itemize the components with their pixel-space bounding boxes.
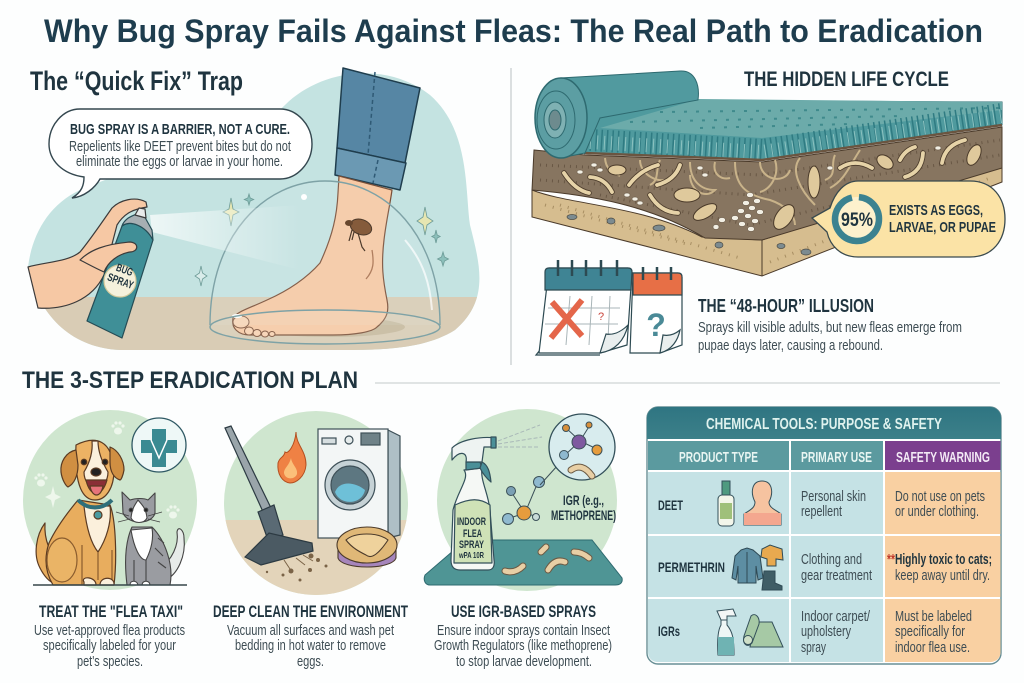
- text block: deep clean: eggs.: [297, 653, 324, 670]
- text block: deep clean: [227, 622, 395, 670]
- row: permethrin: keep away until dry.: [895, 567, 990, 584]
- circle background: [437, 409, 617, 591]
- can label text: SPRAY: [106, 271, 135, 292]
- step 2: deep clean: [213, 405, 410, 670]
- carpet roll: [535, 71, 698, 158]
- row: permethrin: PERMETHRIN: [658, 559, 725, 575]
- text block: 48-hour illusion: pupae days later, causing a rebound.: [698, 337, 883, 354]
- paw prints and sparkles: [34, 421, 180, 518]
- panel: 48-hour illusion: [536, 260, 962, 355]
- heading: IGR sprays: USE IGR-BASED SPRAYS: [451, 602, 596, 621]
- icon: spray bottle: [451, 437, 496, 570]
- bottle label text: [457, 516, 486, 560]
- icon: flame: [278, 432, 306, 483]
- row: permethrin: Clothing and: [801, 551, 862, 568]
- icon: spray and carpet roll: [717, 609, 783, 655]
- jeans leg: [335, 68, 420, 190]
- row: DEET: or under clothing.: [895, 503, 979, 520]
- heading: treat the flea taxi: TREAT THE "FLEA TAXI": [39, 602, 183, 621]
- donut chart: [833, 195, 881, 243]
- sparkles: [195, 194, 448, 286]
- text block: 48-hour illusion: [698, 319, 962, 354]
- larvae on mat: [505, 547, 589, 572]
- row: IGRs: upholstery: [801, 623, 851, 640]
- icon: flea: [345, 216, 374, 251]
- can label text: BUG: [114, 262, 134, 279]
- glass dome: [210, 181, 440, 344]
- icon: dog: [36, 440, 124, 585]
- text block: deep clean: bedding in hot water to remove: [235, 637, 386, 654]
- circle background: [23, 410, 197, 590]
- callout: 95 percent: EXISTS AS EGGS,: [889, 202, 983, 219]
- speech bubble: [49, 109, 312, 198]
- icon: cat: [116, 492, 184, 585]
- bottle label text: wPA 10R: [458, 550, 484, 560]
- carpet mat: [424, 540, 622, 585]
- icon: vacuum cleaner: [225, 426, 313, 565]
- bare foot with flea: [232, 176, 392, 337]
- speech bubble: eliminate the eggs or larvae in your home.: [76, 153, 283, 170]
- icon: blue calendar: ?: [598, 311, 604, 323]
- icon: jacket, shirt and boot: [732, 545, 783, 590]
- icon: orange calendar: [630, 267, 682, 353]
- table frame: [647, 407, 1001, 664]
- heading: quick fix trap: The “Quick Fix” Trap: [30, 66, 243, 96]
- row: IGRs: Must be labeled: [895, 608, 972, 625]
- text block: treat the flea taxi: [34, 622, 185, 670]
- donut chart: 95%: [841, 210, 873, 231]
- table title bar: [647, 407, 1001, 439]
- heading: 48-hour illusion: THE “48-HOUR” ILLUSION: [698, 296, 874, 316]
- row: IGRs: specifically for: [895, 623, 965, 640]
- spray mist: [150, 205, 300, 270]
- column headers: [648, 441, 1000, 470]
- row: DEET: Do not use on pets: [895, 488, 985, 505]
- row: permethrin: gear treatment: [801, 567, 873, 584]
- scene background blob: [20, 73, 490, 357]
- molecule: [502, 476, 544, 524]
- panel: quick fix trap: [20, 66, 490, 357]
- title: Why Bug Spray Fails Against Fleas: The Real Path to Eradication: [44, 13, 983, 49]
- icon: orange calendar: ?: [646, 307, 666, 343]
- text block: IGR sprays: Growth Regulators (like methoprene): [434, 637, 612, 654]
- panel: chemical tools table: [647, 407, 1001, 664]
- eggs: [577, 146, 941, 232]
- label: IGR methoprene: METHOPRENE): [551, 507, 616, 523]
- can label text: [106, 260, 140, 292]
- icon: washing machine: [318, 429, 400, 538]
- row: IGRs: spray: [801, 639, 826, 656]
- magnified IGR bubble: [540, 414, 615, 485]
- row: IGRs: indoor flea use.: [895, 639, 970, 656]
- column headers: PRIMARY USE: [801, 450, 872, 466]
- column headers: SAFETY WARNING: [896, 450, 990, 466]
- carpet: [584, 99, 1002, 160]
- row: DEET: DEET: [658, 497, 683, 513]
- label: IGR methoprene: IGR (e.g.,: [563, 492, 604, 508]
- heading: hidden life cycle: THE HIDDEN LIFE CYCLE: [744, 68, 949, 91]
- row: permethrin: [648, 536, 1000, 597]
- speech bubble: Repelients like DEET prevent bites but do not: [69, 138, 292, 155]
- row: DEET: [648, 472, 1000, 534]
- text block: IGR sprays: Ensure indoor sprays contain Insect: [437, 622, 611, 639]
- icon: repellent bottle and skin: [718, 481, 781, 526]
- pupae: [608, 142, 984, 233]
- text block: IGR sprays: to stop larvae development.: [456, 653, 592, 670]
- icon: vet badge: [132, 418, 186, 472]
- hand and spray can: [28, 199, 153, 338]
- table title bar: CHEMICAL TOOLS: PURPOSE & SAFETY: [706, 416, 942, 433]
- speech bubble: BUG SPRAY IS A BARRIER, NOT A CURE.: [70, 121, 290, 138]
- text block: treat the flea taxi: pet's species.: [77, 653, 143, 670]
- spray mist: [498, 425, 542, 447]
- label: IGR methoprene: [551, 492, 616, 523]
- row: DEET: repellent: [801, 503, 843, 520]
- step 1: treat the flea taxi: [23, 410, 197, 670]
- text block: IGR sprays: [434, 622, 612, 670]
- debris: [266, 554, 328, 582]
- heading: deep clean: DEEP CLEAN THE ENVIRONMENT: [213, 602, 408, 621]
- larvae: [564, 140, 965, 213]
- icon: pet bed: [337, 527, 397, 567]
- bottle label text: FLEA: [463, 528, 482, 540]
- callout: 95 percent: [812, 181, 1005, 257]
- soil cross-section: [532, 127, 1002, 276]
- heading: 3-step eradication plan: THE 3-STEP ERADICATION PLAN: [22, 367, 358, 394]
- text block: deep clean: Vacuum all surfaces and wash pet: [227, 622, 395, 639]
- icon: blue calendar: [536, 260, 632, 355]
- row: IGRs: IGRs: [658, 623, 680, 639]
- text block: treat the flea taxi: Use vet-approved flea products: [34, 622, 185, 639]
- row: IGRs: [648, 599, 1000, 662]
- row: DEET: Personal skin: [801, 488, 866, 505]
- row: IGRs: Indoor carpet/: [801, 608, 871, 625]
- step 3: IGR sprays: [424, 409, 622, 670]
- column headers: PRODUCT TYPE: [679, 450, 758, 466]
- circle background with floor: [224, 411, 408, 595]
- bottle label text: SPRAY: [459, 539, 484, 551]
- panel: hidden life cycle: [532, 68, 1005, 276]
- bottle label text: INDOOR: [457, 516, 486, 528]
- text block: treat the flea taxi: specifically labeled for your: [43, 637, 176, 654]
